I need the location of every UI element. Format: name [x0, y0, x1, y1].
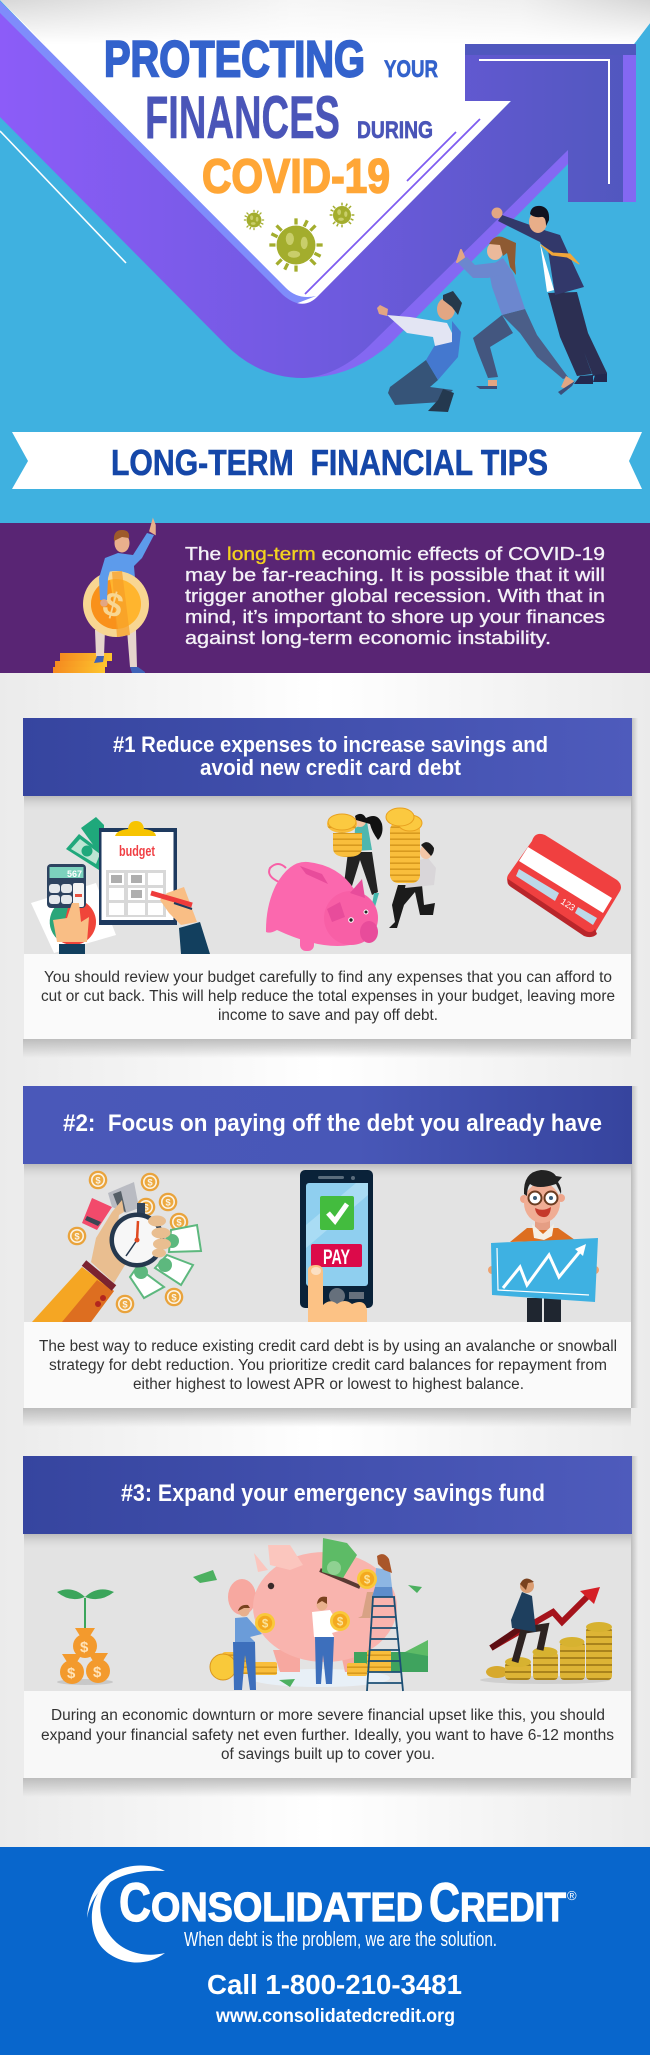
- icon: sprout on money bags: $: [67, 1665, 76, 1682]
- title: FINANCES: [145, 84, 340, 151]
- icon: credit card: [507, 834, 621, 937]
- icon: hand with stopwatch and money: [32, 1171, 201, 1322]
- top grey shading: [0, 0, 650, 44]
- icon: phone pay: PAY: [323, 1246, 350, 1269]
- icon: team filling piggy bank: [193, 1538, 428, 1691]
- logo wordmark: CONSOLIDATEDCREDIT: [119, 1871, 566, 1933]
- banner heading: LONG-TERM FINANCIAL TIPS: [111, 442, 548, 483]
- purple accent lines: [305, 119, 480, 294]
- intro text: trigger another global recession. With that in: [185, 585, 605, 606]
- intro text: The long-term economic effects of COVID-19: [185, 543, 605, 564]
- intro text: [185, 543, 605, 648]
- icon: virus particles: [244, 203, 354, 272]
- icon: budget clipboard and calculator: [31, 817, 210, 954]
- icon: piggy bank and coin carriers: [266, 808, 436, 951]
- icon: sprout on money bags: $: [80, 1639, 89, 1656]
- panel: tip 2: [23, 1086, 638, 1427]
- intro text: may be far-reaching. It is possible that it will: [185, 564, 605, 585]
- icon: phone pay: [300, 1170, 373, 1322]
- tip 1 header: #1 Reduce expenses to increase savings and: [113, 732, 548, 757]
- people pushing arrow: [377, 206, 607, 412]
- logo: [87, 1866, 577, 1962]
- panel: tip 3: [23, 1456, 638, 1797]
- tip 2 body text: either highest to lowest APR or lowest to highest balance.: [133, 1376, 524, 1393]
- intro text: against long-term economic instability.: [185, 627, 551, 648]
- big up arrow: [0, 1, 636, 378]
- title: PROTECTING: [104, 30, 365, 88]
- phone number: Call 1-800-210-3481: [207, 1969, 462, 2000]
- icon: businessman climbing coin stacks: [480, 1578, 612, 1684]
- icon: person holding coin: [53, 520, 155, 673]
- tip 2 header: #2: Focus on paying off the debt you already have: [63, 1110, 602, 1137]
- footer: [0, 1847, 650, 2055]
- tip 3 body text: During an economic downturn or more severe financial upset like this, you should: [51, 1707, 605, 1724]
- woman in blue: [457, 236, 575, 395]
- tip 3 header: #3: Expand your emergency savings fund: [121, 1480, 545, 1507]
- icon: sprout on money bags: [57, 1589, 114, 1685]
- website: www.consolidatedcredit.org: [215, 2006, 455, 2027]
- icon: man with growth chart: [488, 1170, 599, 1322]
- crouching man: [377, 291, 462, 412]
- panel: intro: [0, 520, 650, 673]
- tip 1 body text: [41, 969, 615, 1024]
- white title area: [0, 0, 650, 306]
- tip 2 body text: [39, 1338, 617, 1393]
- icon: credit card: 123: [559, 896, 577, 913]
- tagline: When debt is the problem, we are the solution.: [184, 1929, 497, 1951]
- tip 3 header: [23, 1456, 632, 1534]
- tip 1 header: [23, 718, 632, 796]
- icon: person holding coin: $: [99, 584, 127, 626]
- tip 1 header: avoid new credit card debt: [200, 755, 462, 780]
- title: [104, 30, 438, 204]
- ribbon banner: [12, 432, 642, 489]
- panel: tip 1: [23, 718, 638, 1058]
- registered mark: ®: [567, 1888, 577, 1903]
- tip 2 body text: The best way to reduce existing credit card debt is by using an avalanche or snowball: [39, 1338, 617, 1355]
- tip 1 body text: income to save and pay off debt.: [218, 1007, 438, 1024]
- tip 3 body text: expand your financial safety net even further. Ideally, you want to have 6-12 months: [41, 1727, 614, 1744]
- tip 2 header: [23, 1086, 632, 1164]
- tip 3 body text: of savings built up to cover you.: [221, 1746, 435, 1763]
- title: COVID-19: [202, 150, 390, 204]
- page background: [0, 673, 650, 1847]
- logo swoosh: [87, 1866, 165, 1962]
- icon: budget clipboard and calculator: 567: [67, 869, 82, 879]
- white accent line: [0, 131, 126, 263]
- tip 1 body text: cut or cut back. This will help reduce the total expenses in your budget, leaving more: [41, 988, 615, 1005]
- icon: budget clipboard and calculator: budget: [119, 843, 155, 860]
- man in suit: [492, 206, 607, 384]
- title: DURING: [357, 117, 433, 144]
- title: YOUR: [384, 56, 438, 83]
- tip 2 body text: strategy for debt reduction. You prioritize credit card balances for repayment from: [49, 1357, 607, 1374]
- icon: sprout on money bags: $: [93, 1664, 102, 1681]
- hero section: [0, 0, 650, 523]
- intro text: mind, it’s important to shore up your finances: [185, 606, 605, 627]
- tip 3 body text: [41, 1707, 614, 1763]
- tip 1 body text: You should review your budget carefully to find any expenses that you can afford to: [44, 969, 612, 986]
